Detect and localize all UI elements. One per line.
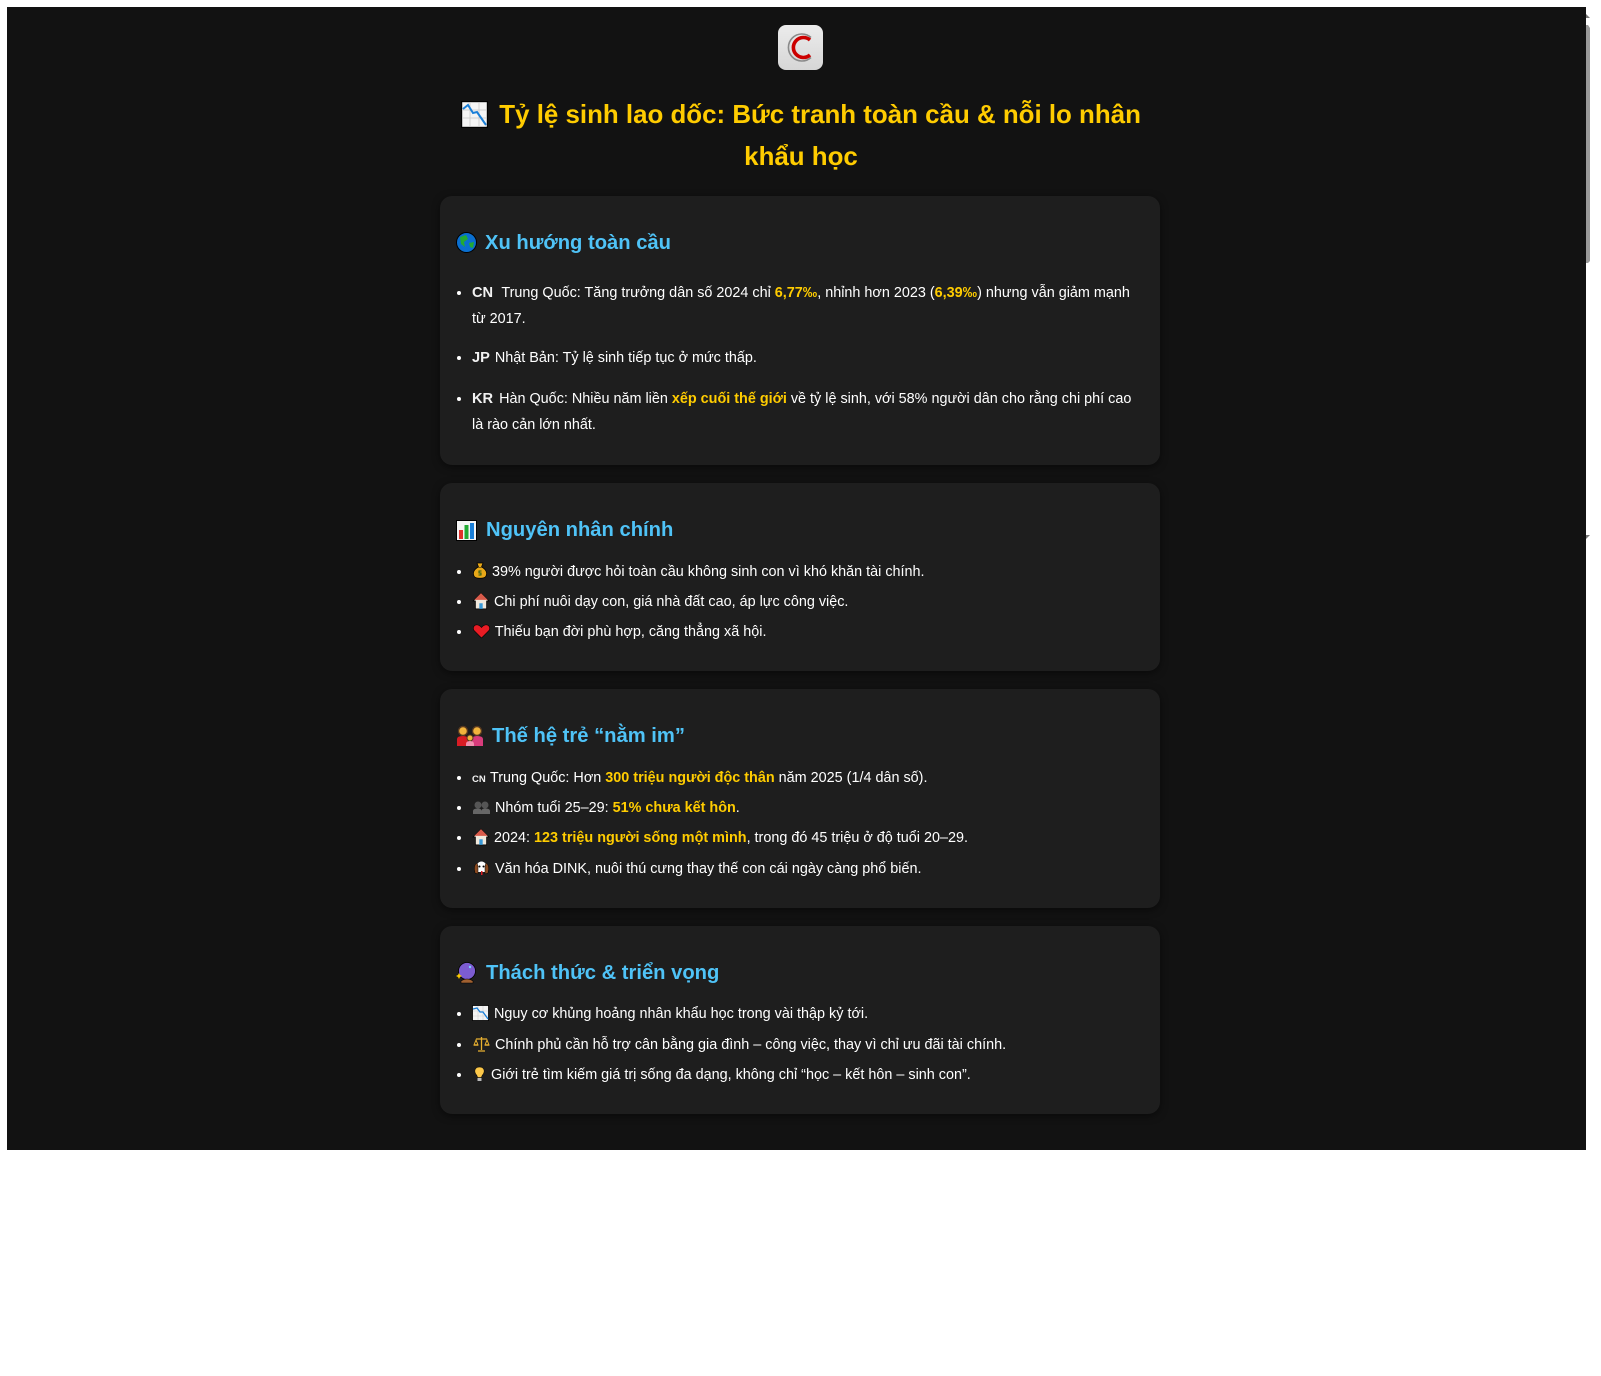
title: Tỷ lệ sinh lao dốc: Bức tranh toàn cầu & nỗi lo nhân khẩu học — [499, 101, 1141, 171]
item: singles in China: CN Trung Quốc: Hơn 300 triệu người độc thân năm 2025 (1/4 dân số). — [472, 770, 927, 786]
heading: global trend: Xu hướng toàn cầu — [485, 232, 671, 254]
item: unmarried age group: Nhóm tuổi 25–29: 51% chưa kết hôn. — [495, 800, 740, 816]
panel: main causes — [440, 483, 1160, 671]
item: Korea: KR Hàn Quốc: Nhiều năm liền xếp cuối thế giới về tỷ lệ sinh, với 58% người dân cho rằng chi phí cao là rào cản lớn nhất. — [472, 391, 1131, 433]
item: housing cost: Chi phí nuôi dạy con, giá nhà đất cao, áp lực công việc. — [494, 594, 848, 610]
item: DINK and pets: Văn hóa DINK, nuôi thú cưng thay thế con cái ngày càng phổ biến. — [495, 861, 921, 877]
heading: challenges and outlook: Thách thức & triển vọng — [486, 962, 719, 984]
item: demographic crisis: Nguy cơ khủng hoảng nhân khẩu học trong vài thập kỷ tới. — [494, 1006, 868, 1022]
item: Japan: JP Nhật Bản: Tỷ lệ sinh tiếp tục ở mức thấp. — [472, 350, 757, 366]
heading: main causes: Nguyên nhân chính — [486, 519, 673, 541]
panel: challenges and outlook — [440, 926, 1160, 1114]
panel: global trend — [440, 196, 1160, 465]
item: partner and stress: Thiếu bạn đời phù hợp, căng thẳng xã hội. — [495, 624, 766, 640]
item: living alone: 2024: 123 triệu người sống một mình, trong đó 45 triệu ở độ tuổi 20–29. — [494, 830, 968, 846]
item: China: CN Trung Quốc: Tăng trưởng dân số 2024 chỉ 6,77‰, nhỉnh hơn 2023 (6,39‰) nhưng vẫn giảm mạnh từ 2017. — [472, 285, 1130, 327]
item: financial hardship: 39% người được hỏi toàn cầu không sinh con vì khó khăn tài chính. — [492, 564, 925, 580]
list: global trend items — [457, 284, 1131, 433]
list: outlook items — [457, 1005, 1006, 1083]
item: work-life balance: Chính phủ cần hỗ trợ cân bằng gia đình – công việc, thay vì chỉ ưu đãi tài chính. — [495, 1037, 1006, 1053]
heading: young generation: Thế hệ trẻ “nằm im” — [492, 725, 685, 747]
panel: young generation — [440, 689, 1160, 908]
list: causes — [457, 562, 925, 640]
item: diverse life values: Giới trẻ tìm kiếm giá trị sống đa dạng, không chỉ “học – kết hôn – sinh con”. — [491, 1067, 971, 1083]
logo — [778, 25, 823, 70]
scrollbar fragment — [1586, 14, 1590, 539]
list: young generation items — [457, 770, 968, 877]
